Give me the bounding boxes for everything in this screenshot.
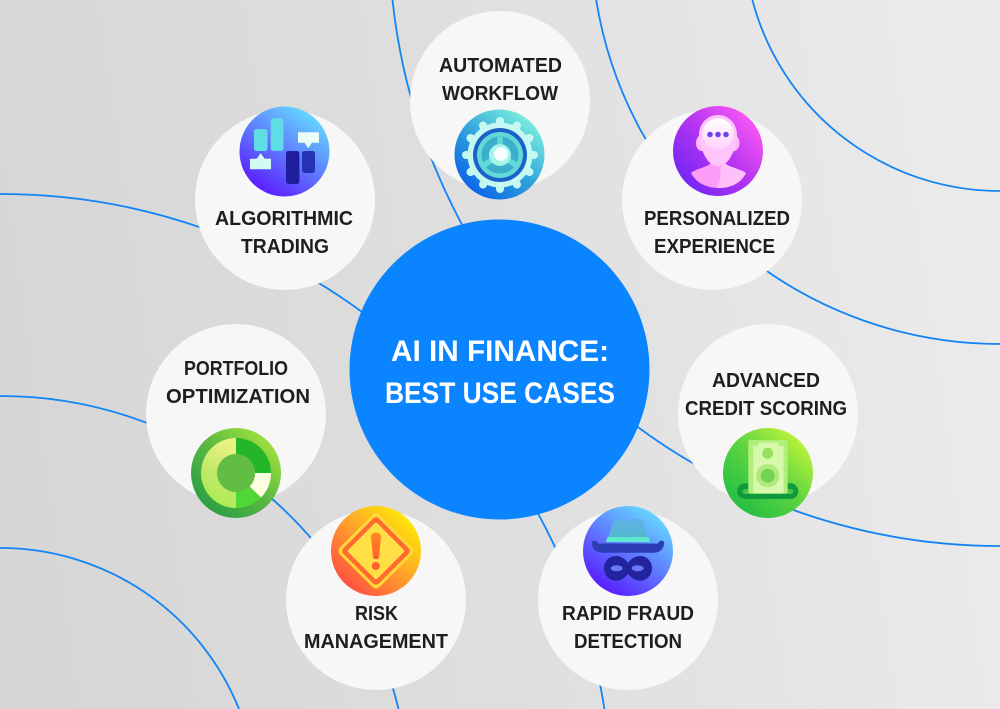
icon: portfolio donut chart [191,428,281,518]
heading: personalized experience: EXPERIENCE [654,236,775,258]
heading: rapid fraud detection: RAPID FRAUD [562,603,694,625]
icon: personalized experience avatar [673,106,763,196]
icon: automated workflow gear [454,110,544,200]
panel: personalized experience [622,110,802,290]
icon: algorithmic trading bars [240,106,330,196]
heading: rapid fraud detection: DETECTION [574,631,682,653]
heading: algorithmic trading [215,208,353,258]
icon: credit scoring speaker safe [723,428,813,518]
title [385,335,615,410]
heading: advanced credit scoring [685,370,847,420]
heading: algorithmic trading: ALGORITHMIC [215,208,353,230]
central hub [350,220,650,520]
panel: algorithmic trading [195,110,375,290]
heading: risk management: MANAGEMENT [304,631,448,653]
panel: automated workflow [410,11,590,191]
heading: automated workflow: AUTOMATED [439,55,562,77]
heading: automated workflow: WORKFLOW [442,83,558,105]
icon: fraud detective hat and mask [583,506,673,596]
heading: personalized experience: PERSONALIZED [644,208,790,230]
heading: personalized experience [644,208,790,258]
title: BEST USE CASES [385,377,615,410]
panel: portfolio optimization [146,324,326,504]
heading: risk management: RISK [355,603,398,625]
heading: rapid fraud detection [562,603,694,653]
heading: advanced credit scoring: ADVANCED [712,370,820,392]
heading: portfolio optimization: PORTFOLIO [184,358,288,380]
panel: risk management [286,510,466,690]
panel: advanced credit scoring [678,324,858,504]
panel: rapid fraud detection [538,510,718,690]
heading: algorithmic trading: TRADING [241,236,329,258]
heading: portfolio optimization [166,358,310,408]
title: AI IN FINANCE: [391,335,609,368]
heading: advanced credit scoring: CREDIT SCORING [685,398,847,420]
heading: portfolio optimization: OPTIMIZATION [166,386,310,408]
heading: risk management [304,603,448,653]
heading: automated workflow [439,55,562,105]
icon: risk warning sign [331,506,421,596]
